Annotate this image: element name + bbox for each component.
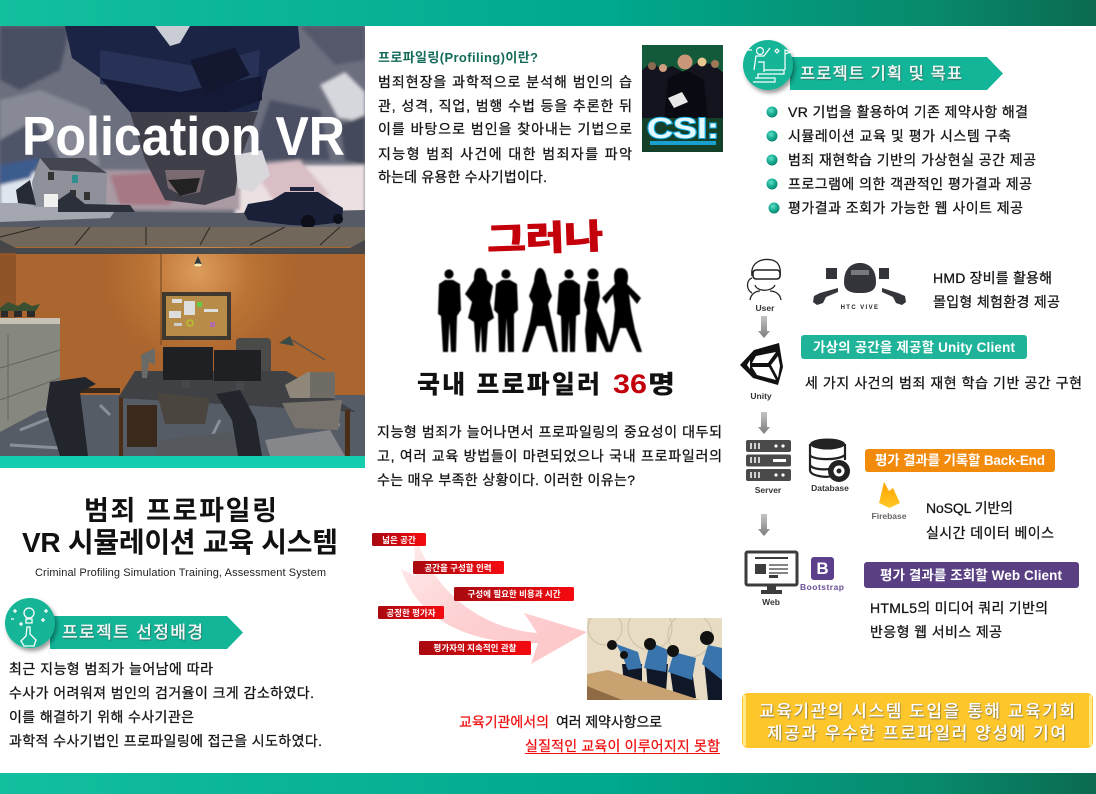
section heading: project background: 프로젝트 선정배경 bbox=[62, 623, 203, 642]
teal strip under cover bbox=[0, 456, 365, 468]
arrow: server to web bbox=[758, 514, 770, 536]
desk bbox=[118, 371, 356, 412]
icon: person climbing steps bbox=[746, 48, 791, 82]
heading: however: 그러나 bbox=[486, 218, 604, 260]
road bbox=[0, 210, 365, 227]
cork board bbox=[162, 292, 231, 340]
icon: Bootstrap logo: Bootstrap bbox=[800, 582, 844, 592]
goals list bbox=[766, 104, 1036, 216]
heading: 36 profilers in Korea: 국내 프로파일러 bbox=[417, 371, 600, 399]
text: NoSQL description bbox=[926, 500, 1054, 541]
label: Web Client: 평가 결과를 조회할 Web Client bbox=[880, 568, 1062, 583]
goal 2: 시뮬레이션 교육 및 평가 시스템 구축 bbox=[788, 128, 1011, 144]
image: CSI poster: CSI: bbox=[647, 113, 719, 145]
constraint tags: 공간을 구성할 인력 bbox=[424, 563, 492, 573]
text: Web description bbox=[870, 600, 1048, 640]
icon: Firebase logo: Firebase bbox=[872, 511, 907, 521]
icon: database bbox=[810, 438, 850, 493]
text: Unity description: 세 가지 사건의 범죄 재현 학습 기반 공간 구현 bbox=[805, 375, 1082, 391]
text: profiling definition: 범죄현장을 과학적으로 분석해 범인의 습 bbox=[378, 74, 632, 90]
main title: 범죄 프로파일링 bbox=[84, 496, 277, 526]
icon: Bootstrap logo bbox=[800, 557, 844, 592]
section heading: project plan and goals: 프로젝트 기획 및 목표 bbox=[800, 64, 962, 83]
icon: HTC Vive kit bbox=[813, 263, 906, 311]
main title bbox=[22, 496, 338, 558]
text: background description: 최근 지능형 범죄가 늘어남에 따라 bbox=[9, 661, 213, 677]
icon: light bulb and hand bbox=[11, 608, 48, 646]
icon: Unity logo: Unity bbox=[750, 391, 772, 401]
arrow: user to unity bbox=[758, 316, 770, 338]
caption: constraints result bbox=[459, 714, 720, 754]
main title: VR 시뮬레이션 교육 시스템 bbox=[22, 527, 338, 558]
VR controllers bbox=[46, 377, 96, 456]
icon: server bbox=[746, 440, 791, 495]
text: profiling definition: 관, 성격, 직업, 범행 수법 등을 추론한 뒤 bbox=[378, 98, 632, 114]
heading: 36 profilers in Korea: 36 bbox=[613, 369, 647, 399]
constraint tags: 구성에 필요한 비용과 시간 bbox=[467, 589, 561, 599]
heading: what is profiling: 프로파일링(Profiling)이란? bbox=[378, 50, 538, 65]
text: profiling definition bbox=[378, 74, 632, 185]
icon: web monitor: Web bbox=[762, 597, 780, 607]
chair back and desk lamp bbox=[236, 338, 271, 371]
icon: VR user: User bbox=[756, 303, 775, 313]
english subtitle: Criminal Profiling Simulation Training, Assessment System bbox=[35, 567, 326, 579]
icon: silhouettes of seven profilers bbox=[438, 268, 642, 352]
goal 4: 프로그램에 의한 객관적인 평가결과 제공 bbox=[788, 176, 1032, 192]
cover title: Polication VR bbox=[22, 105, 345, 167]
house bbox=[32, 158, 107, 207]
constraint tags: 넓은 공간 bbox=[382, 535, 416, 545]
icon: server: Server bbox=[755, 485, 782, 495]
caption: constraints result: 교육기관에서의 bbox=[459, 714, 549, 730]
police hat bbox=[65, 26, 300, 112]
constraint tags: 평가자의 지속적인 관찰 bbox=[434, 643, 517, 653]
goal 5: 평가결과 조회가 가능한 웹 사이트 제공 bbox=[788, 200, 1023, 216]
section heading: project plan and goals bbox=[743, 40, 1003, 90]
text: Web description: HTML5의 미디어 쿼리 기반의 bbox=[870, 600, 1048, 616]
label: Unity Client: 가상의 공간을 제공할 Unity Client bbox=[813, 340, 1016, 355]
icon: Bootstrap logo: B bbox=[816, 559, 829, 578]
label: Web Client bbox=[864, 562, 1079, 588]
constraint tags: 공정한 평가자 bbox=[386, 608, 436, 618]
heading: 36 profilers in Korea bbox=[417, 369, 675, 399]
bullet bbox=[766, 106, 778, 118]
bottom footer bar bbox=[0, 773, 1096, 794]
bullet bbox=[766, 130, 778, 142]
text: background description: 이를 해결하기 위해 수사기관은 bbox=[9, 709, 194, 725]
icon: web monitor bbox=[746, 552, 797, 607]
callout: conclusion bbox=[742, 693, 1093, 748]
bullet bbox=[768, 202, 780, 214]
text: NoSQL description: 실시간 데이터 베이스 bbox=[926, 525, 1054, 541]
text: background description bbox=[9, 661, 322, 749]
illustration: police hat and crime scene cover bbox=[0, 26, 365, 229]
text: HMD description bbox=[933, 270, 1060, 310]
officers bbox=[607, 631, 722, 700]
text: shortage explanation: 고, 여러 교육 방법들이 마련되었으나 국내 프로파일러의 bbox=[377, 448, 722, 464]
plants bbox=[0, 302, 40, 311]
image: CSI poster bbox=[642, 45, 723, 152]
callout: conclusion: 교육기관의 시스템 도입을 통해 교육기회 bbox=[759, 702, 1075, 721]
caption: constraints result: 실질적인 교육이 이루어지지 못함 bbox=[525, 738, 720, 754]
goal 3: 범죄 재현학습 기반의 가상현실 공간 제공 bbox=[788, 152, 1036, 168]
label: Back-End: 평가 결과를 기록할 Back-End bbox=[875, 453, 1045, 468]
icon: HTC Vive kit: HTC VIVE bbox=[841, 305, 879, 311]
constraint tags bbox=[372, 533, 574, 655]
text: NoSQL description: NoSQL 기반의 bbox=[926, 500, 1013, 516]
chairs bbox=[157, 393, 210, 424]
text: background description: 과학적 수사기법인 프로파일링에 접근을 시도하였다. bbox=[9, 733, 322, 749]
table bbox=[587, 670, 700, 700]
police car bbox=[244, 192, 343, 226]
text: HMD description: 몰입형 체험환경 제공 bbox=[933, 294, 1060, 310]
image: police officers bowing bbox=[587, 618, 722, 700]
heading: 36 profilers in Korea: 명 bbox=[648, 371, 675, 399]
goal 1: VR 기법을 활용하여 기존 제약사항 해결 bbox=[788, 104, 1028, 120]
text: background description: 수사가 어려워져 범인의 검거율이 크게 감소하였다. bbox=[9, 685, 314, 701]
text: profiling definition: 하는데 유용한 수사기법이다. bbox=[378, 169, 547, 185]
filing cabinet bbox=[0, 320, 60, 432]
monitor on desk right bbox=[285, 372, 310, 398]
icon: VR user bbox=[748, 260, 781, 313]
text: Web description: 반응형 웹 서비스 제공 bbox=[870, 624, 1002, 640]
monitors bbox=[163, 347, 213, 380]
lamp bbox=[194, 256, 202, 265]
bullet bbox=[766, 154, 778, 166]
caption: constraints result: 여러 제약사항으로 bbox=[556, 714, 662, 730]
top header bar bbox=[0, 0, 1096, 26]
text: HMD description: HMD 장비를 활용해 bbox=[933, 270, 1052, 286]
floor bbox=[0, 395, 365, 456]
bullet bbox=[766, 178, 778, 190]
icon: Unity logo bbox=[740, 343, 783, 401]
label: Unity Client bbox=[801, 335, 1027, 359]
section heading: project background bbox=[5, 598, 243, 649]
fan bbox=[141, 348, 155, 378]
arrow: pink curved arrow bbox=[401, 527, 587, 664]
face bbox=[130, 112, 258, 205]
illustration: VR office room screenshot bbox=[0, 227, 365, 456]
icon: Firebase logo bbox=[872, 482, 907, 521]
icon: database: Database bbox=[811, 483, 849, 493]
callout: conclusion: 제공과 우수한 프로파일러 양성에 기여 bbox=[767, 724, 1066, 743]
text: profiling definition: 이를 바탕으로 범인을 찾아내는 기법으로 bbox=[378, 121, 632, 137]
text: shortage explanation: 수는 매우 부족한 상황이다. 이러한 이유는? bbox=[377, 472, 635, 488]
text: shortage explanation bbox=[377, 424, 722, 488]
text: shortage explanation: 지능형 범죄가 늘어나면서 프로파일링의 중요성이 대두되 bbox=[377, 424, 722, 440]
arrow: unity to server bbox=[758, 412, 770, 434]
label: Back-End bbox=[865, 449, 1055, 472]
text: profiling definition: 지능형 범죄 사건에 대한 범죄자를 파악 bbox=[378, 146, 632, 162]
